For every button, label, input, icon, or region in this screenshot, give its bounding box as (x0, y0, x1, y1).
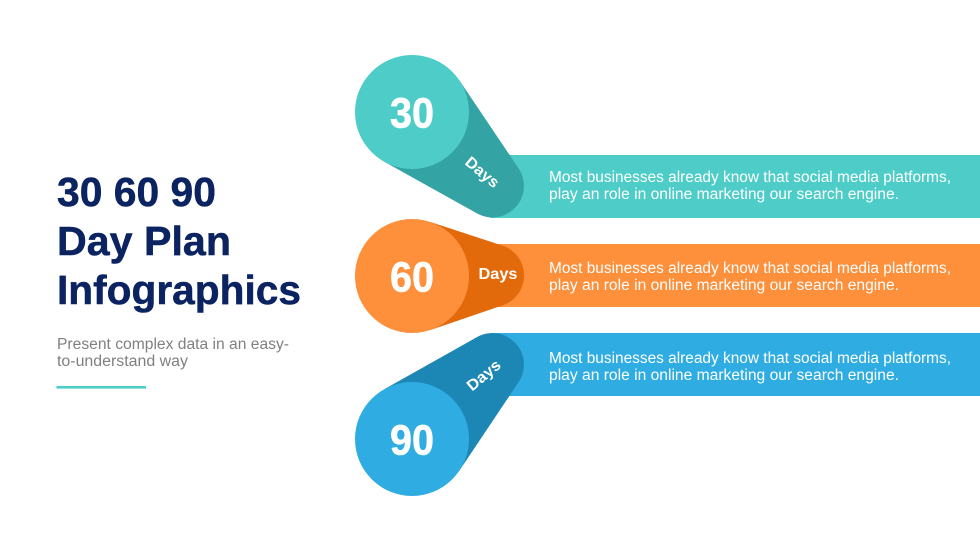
subtitle (57, 336, 289, 370)
title: Day Plan (57, 218, 231, 264)
description: 60 days (549, 260, 951, 294)
subtitle: to-understand way (57, 353, 188, 370)
description: 60 days: play an role in online marketing our search engine. (549, 277, 899, 294)
circle: 60 (355, 219, 469, 333)
cylinder: 60 days (430, 222, 524, 330)
band: 30 days (490, 155, 980, 218)
label: days: Days (464, 357, 505, 395)
accent underline (56, 386, 146, 389)
title (57, 169, 301, 313)
description: 90 days: Most businesses already know that social media platforms, (549, 350, 951, 367)
cylinder: 90 days (384, 333, 524, 471)
panel: 90 days (355, 333, 980, 496)
band: 90 days (490, 333, 980, 396)
description: 90 days (549, 350, 951, 384)
panel: 30 days (355, 55, 980, 218)
number: 90: 90 (390, 416, 434, 464)
panel: 60 days (355, 219, 980, 333)
label: days: Days (461, 154, 502, 192)
band: 60 days (490, 244, 980, 307)
circle: 90 (355, 382, 469, 496)
description: 30 days: Most businesses already know that social media platforms, (549, 169, 951, 186)
number: 30: 30 (390, 90, 434, 138)
description: 90 days: play an role in online marketing our search engine. (549, 367, 899, 384)
number: 60: 60 (390, 254, 434, 302)
title: Infographics (57, 267, 301, 313)
label: days: Days (478, 266, 518, 283)
description: 60 days: Most businesses already know that social media platforms, (549, 260, 951, 277)
circle: 30 (355, 55, 469, 169)
title: 30 60 90 (57, 169, 216, 215)
description: 30 days (549, 169, 951, 203)
description: 30 days: play an role in online marketing our search engine. (549, 186, 899, 203)
cylinder: 30 days (384, 80, 524, 217)
subtitle: Present complex data in an easy- (57, 336, 289, 353)
